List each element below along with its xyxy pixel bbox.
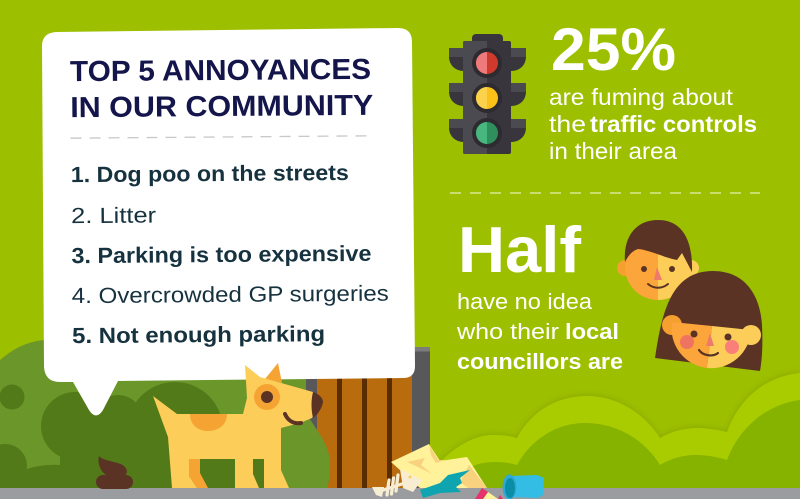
heading: TOP 5 ANNOYANCES xyxy=(70,54,371,88)
bush: dark green xyxy=(0,382,270,488)
ranked list: 5. Not enough parking xyxy=(72,321,325,348)
stat: 25%: are fuming about xyxy=(549,84,734,110)
heading: IN OUR COMMUNITY xyxy=(70,90,373,124)
ranked list: 1. Dog poo on the streets xyxy=(71,160,349,187)
stat: half: councillors are xyxy=(457,349,623,374)
ranked list: 2. Litter xyxy=(71,203,156,228)
bubble content xyxy=(70,54,389,348)
dashed divider xyxy=(71,136,371,138)
icon: dog poo xyxy=(96,456,133,489)
stat: half: who their xyxy=(456,319,559,344)
wheelie bin xyxy=(306,347,430,488)
icon: dog xyxy=(153,363,323,488)
speech bubble xyxy=(42,28,415,416)
stat: 25%: in their area xyxy=(549,138,677,164)
stat: 25%: 25% xyxy=(551,16,676,83)
stat: half xyxy=(456,213,623,374)
icon: girl face xyxy=(655,271,762,371)
ranked list: 3. Parking is too expensive xyxy=(71,241,372,268)
icon: boy face xyxy=(617,220,699,300)
stat: 25%: traffic controls xyxy=(590,111,757,137)
litter: broken bottle xyxy=(420,470,470,498)
stat: 25% xyxy=(549,16,757,164)
bush: light green xyxy=(0,340,330,488)
stat: half: have no idea xyxy=(457,289,593,314)
stat: half: Half xyxy=(458,213,581,286)
ground xyxy=(0,488,800,499)
hills: right xyxy=(440,373,800,488)
ranked list: 4. Overcrowded GP surgeries xyxy=(72,281,389,308)
litter: blue cup xyxy=(502,474,544,499)
litter: pink wrapper xyxy=(475,488,503,499)
litter: crumpled paper xyxy=(391,444,487,488)
ranked list xyxy=(71,160,389,348)
stat: 25%: the xyxy=(549,111,586,137)
heading xyxy=(70,54,373,124)
litter: fish bone xyxy=(372,469,422,497)
icon: traffic light xyxy=(449,34,526,154)
stat: half: local xyxy=(565,319,619,344)
